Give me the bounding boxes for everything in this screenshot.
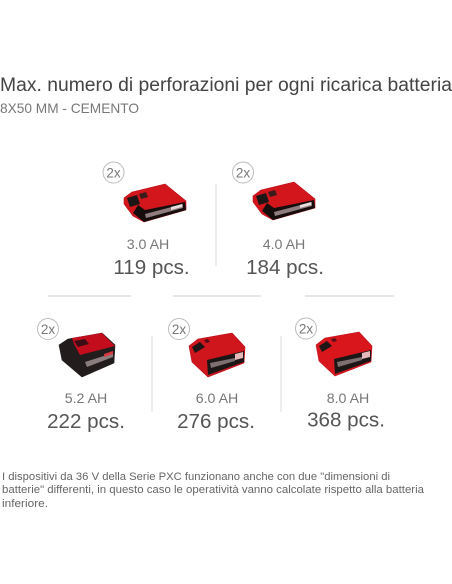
footnote: batterie" differenti, in questo caso le operatività vanno calcolate rispetto alla batteria xyxy=(2,484,425,496)
subtitle: 8X50 MM - CEMENTO xyxy=(0,100,139,116)
item: 3.0 AH xyxy=(103,162,190,279)
value: 119 pcs. xyxy=(113,256,190,279)
item: 4.0 AH xyxy=(232,162,324,279)
icon: battery 8.0 xyxy=(316,332,372,376)
badge: 2x: 2x xyxy=(299,322,313,336)
badge: 2x: 2x xyxy=(172,322,186,337)
value: 222 pcs. xyxy=(47,410,125,433)
footnote: inferiore. xyxy=(2,498,48,510)
item: 8.0 AH xyxy=(296,318,385,432)
footnote: I dispositivi da 36 V della Serie PXC funzionano anche con due "dimensioni di xyxy=(2,471,390,483)
label: 6.0 AH xyxy=(196,391,238,407)
label: 8.0 AH xyxy=(327,391,369,407)
footnote xyxy=(2,471,425,510)
icon: battery 5.2 xyxy=(59,333,115,377)
item: 6.0 AH xyxy=(168,318,255,433)
value: 184 pcs. xyxy=(246,256,324,279)
badge: 2x: 2x xyxy=(41,322,55,337)
icon: battery 6.0 xyxy=(189,333,245,377)
value: 276 pcs. xyxy=(177,410,255,433)
badge: 2x: 2x xyxy=(106,166,121,180)
title: Max. numero di perforazioni per ogni ricarica batteria xyxy=(0,75,452,96)
label: 5.2 AH xyxy=(65,391,107,407)
badge: 2x: 2x xyxy=(236,166,250,180)
value: 368 pcs. xyxy=(307,408,385,432)
item: 5.2 AH xyxy=(38,318,125,433)
icon: battery 3.0 xyxy=(124,184,186,222)
label: 3.0 AH xyxy=(127,237,169,253)
icon: battery 4.0 xyxy=(253,182,315,220)
label: 4.0 AH xyxy=(263,237,305,253)
